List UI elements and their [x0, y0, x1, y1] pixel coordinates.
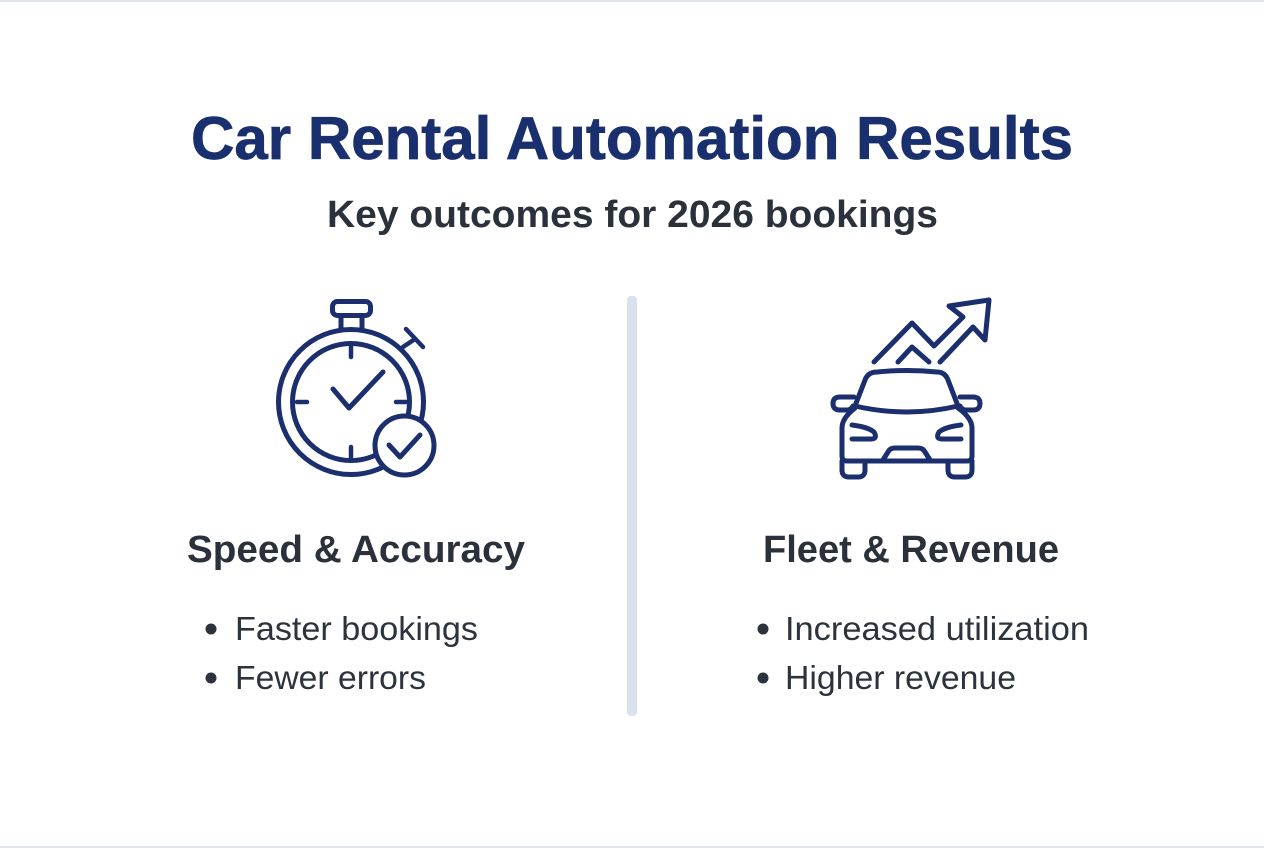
bullet list: fleet and revenue: Higher revenue — [785, 659, 1016, 696]
bullet list: fleet and revenue — [758, 610, 1089, 696]
panel: speed and accuracy — [187, 302, 525, 696]
divider — [627, 296, 637, 716]
heading: fleet and revenue: Fleet & Revenue — [763, 529, 1059, 571]
bullet list: fleet and revenue: Increased utilization — [785, 610, 1089, 647]
icon: car with rising arrow — [833, 300, 989, 477]
panel: fleet and revenue — [758, 300, 1089, 696]
bullet list: speed and accuracy: Faster bookings — [235, 610, 478, 647]
subtitle: Key outcomes for 2026 bookings — [327, 194, 938, 236]
icon: stopwatch with check badge — [278, 302, 434, 475]
heading: speed and accuracy: Speed & Accuracy — [187, 529, 525, 571]
title: Car Rental Automation Results — [191, 105, 1073, 172]
bullet list: speed and accuracy: Fewer errors — [235, 659, 426, 696]
bullet list: speed and accuracy — [206, 610, 478, 696]
